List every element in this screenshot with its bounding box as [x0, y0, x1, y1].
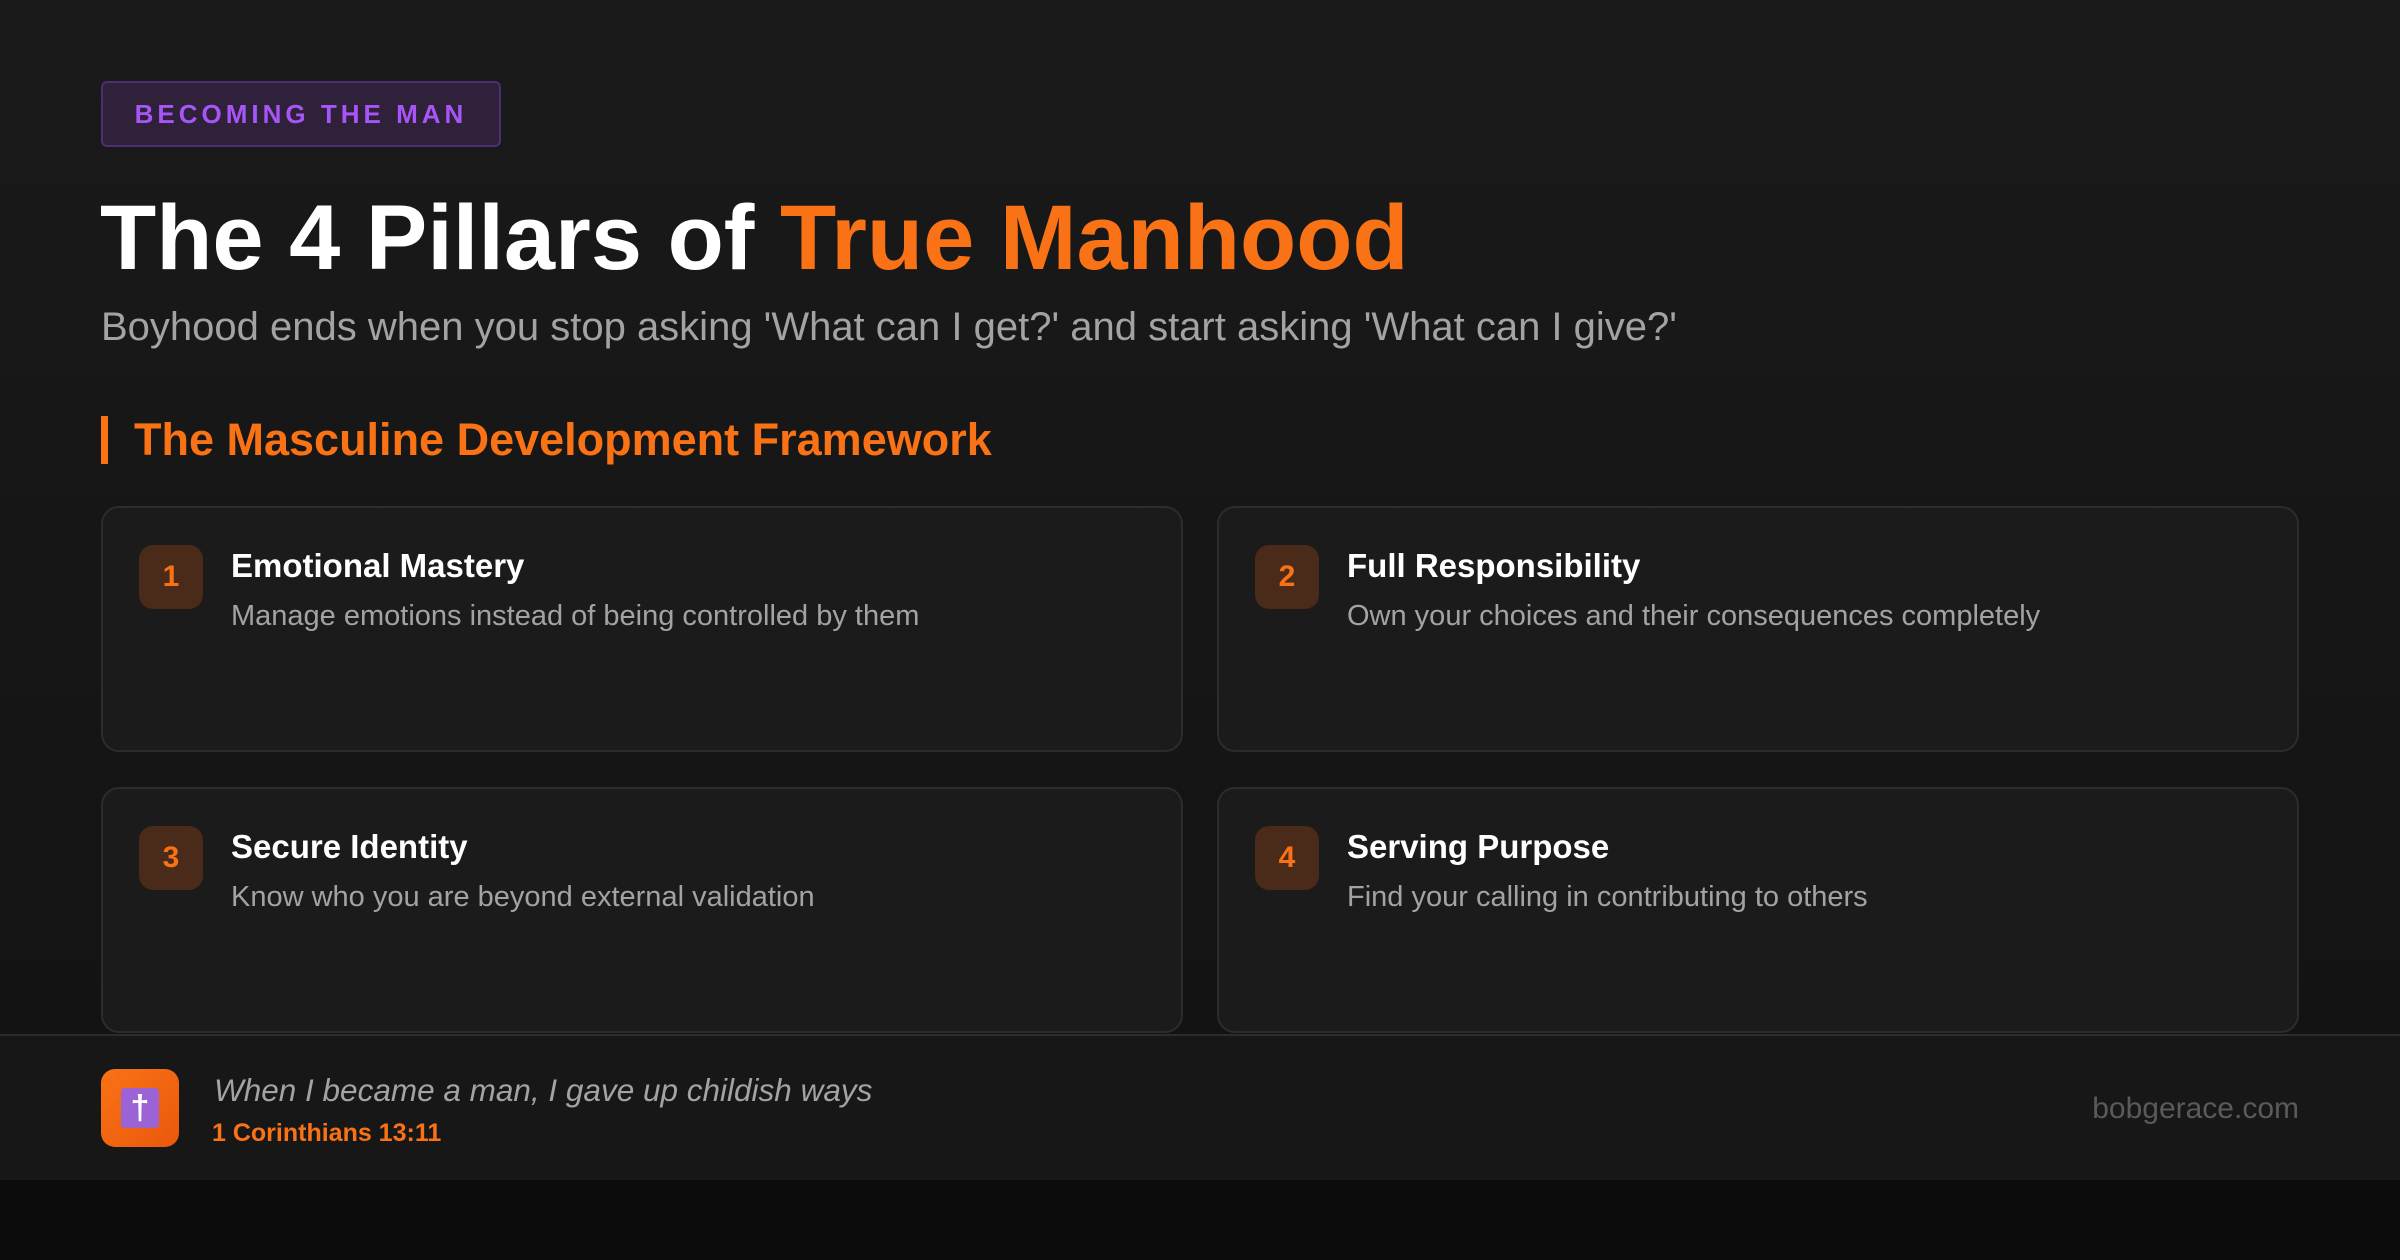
card title: Emotional Mastery [231, 547, 524, 584]
card 3 [101, 787, 1183, 1033]
number 1: 1 [163, 560, 179, 593]
card 4 [1217, 787, 2299, 1033]
card desc: Find your calling in contributing to others [1347, 881, 1868, 913]
icon: cross [101, 1069, 179, 1147]
number 3: 3 [163, 841, 179, 874]
title: The 4 Pillars of True Manhood [100, 187, 1409, 289]
number 3 [139, 826, 203, 890]
section heading: The Masculine Development Framework [134, 414, 992, 465]
card desc: Manage emotions instead of being controlled by them [231, 600, 919, 632]
quote: When I became a man, I gave up childish ways [214, 1072, 872, 1108]
icon: cross: † [131, 1089, 149, 1127]
card title: Secure Identity [231, 828, 468, 865]
card 2 [1217, 506, 2299, 752]
badge: BECOMING THE MAN [135, 98, 467, 128]
number 2 [1255, 545, 1319, 609]
card title: Full Responsibility [1347, 547, 1640, 584]
card title: Serving Purpose [1347, 828, 1609, 865]
number 4: 4 [1279, 841, 1295, 874]
footer [0, 1034, 2400, 1180]
number 1 [139, 545, 203, 609]
card 1 [101, 506, 1183, 752]
number 2: 2 [1279, 560, 1295, 593]
subtitle: Boyhood ends when you stop asking 'What can I get?' and start asking 'What can I give?' [101, 305, 1677, 349]
card desc: Own your choices and their consequences completely [1347, 600, 2040, 632]
card desc: Know who you are beyond external validation [231, 881, 815, 913]
badge [101, 81, 501, 147]
number 4 [1255, 826, 1319, 890]
website: bobgerace.com [2092, 1092, 2299, 1125]
reference: 1 Corinthians 13:11 [212, 1119, 441, 1147]
